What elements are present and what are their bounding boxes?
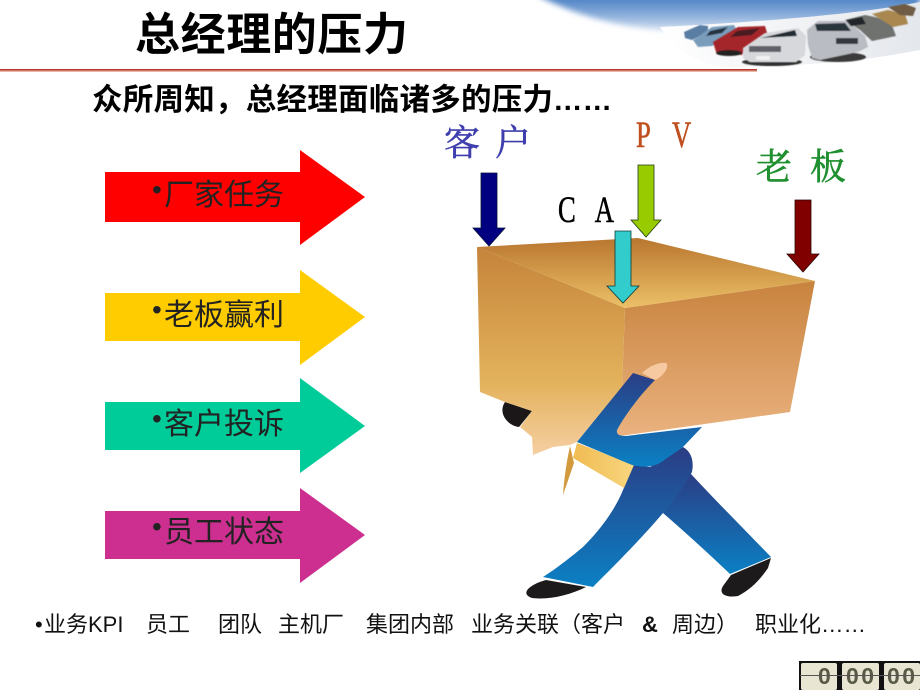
front leg [543,447,693,587]
bottom text: …… [821,612,866,637]
label: 老板: 老板 [756,147,846,187]
bottom text: 主机厂 [278,612,344,637]
arrow: 老板 down [787,200,819,272]
bottom text: 团队 [218,612,262,637]
arrow: 客户投诉 [105,378,365,473]
bottom text [35,612,866,637]
car: blue small [684,25,708,40]
arrow: 厂家任务: • [152,174,162,205]
title: 总经理的压力 [135,9,408,60]
timer widget: 0 [818,663,831,689]
bottom text: 周边） [672,612,738,637]
bottom text: 业务KPI [44,612,123,637]
arrow: CA down [607,231,639,303]
back shoe [721,558,771,597]
timer widget: 00 [846,663,874,689]
back leg [663,473,771,574]
car: silver sedan [742,28,806,66]
arrow: 老板赢利: • [152,294,162,325]
car: bronze [872,10,908,27]
car: silver SUV [807,21,868,62]
arrow: 老板赢利 [105,270,365,365]
scarf tail [563,446,574,495]
bottom text: 员工 [146,612,190,637]
box right face [610,281,815,436]
front shoe [526,580,586,598]
arm and torso [577,373,702,467]
bottom text: & [642,612,658,637]
arrow: 客户投诉: 客户投诉 [164,408,284,441]
box top face [477,238,815,308]
label: PV: PV [636,114,691,155]
bottom text: 职业化 [755,612,821,637]
subtitle: …… [553,85,612,117]
arrow: 员工状态 [105,488,365,583]
hand [642,363,667,380]
timer widget: 00 [887,663,915,689]
arrow: 客户投诉: • [152,403,162,434]
arrow: 厂家任务: 厂家任务 [164,179,284,212]
header banner with cars [535,0,920,67]
arrow: PV down [631,165,661,237]
arrow: 客户 down [473,173,505,246]
bottom text: 业务关联（客户 [471,612,625,637]
timer widget [799,661,920,690]
label: 客户: 客户 [444,123,531,163]
bottom text: • [35,612,43,637]
arrow: 员工状态: 员工状态 [164,516,284,549]
hair [502,402,532,427]
bottom text: 集团内部 [366,612,454,637]
scarf [573,443,634,488]
arrow: 员工状态: • [152,511,162,542]
title rule [0,69,757,72]
car: brown [888,4,916,16]
figure: man carrying box [477,238,815,598]
arrow: 厂家任务 [105,150,365,245]
arrow: 老板赢利: 老板赢利 [164,299,284,332]
car: dark SUV [845,15,896,41]
car: blue [693,25,738,47]
label: CA: CA [558,189,615,230]
subtitle: 众所周知，总经理面临诸多的压力 [92,83,553,117]
car: red [713,26,768,56]
box left face with face [477,247,625,455]
